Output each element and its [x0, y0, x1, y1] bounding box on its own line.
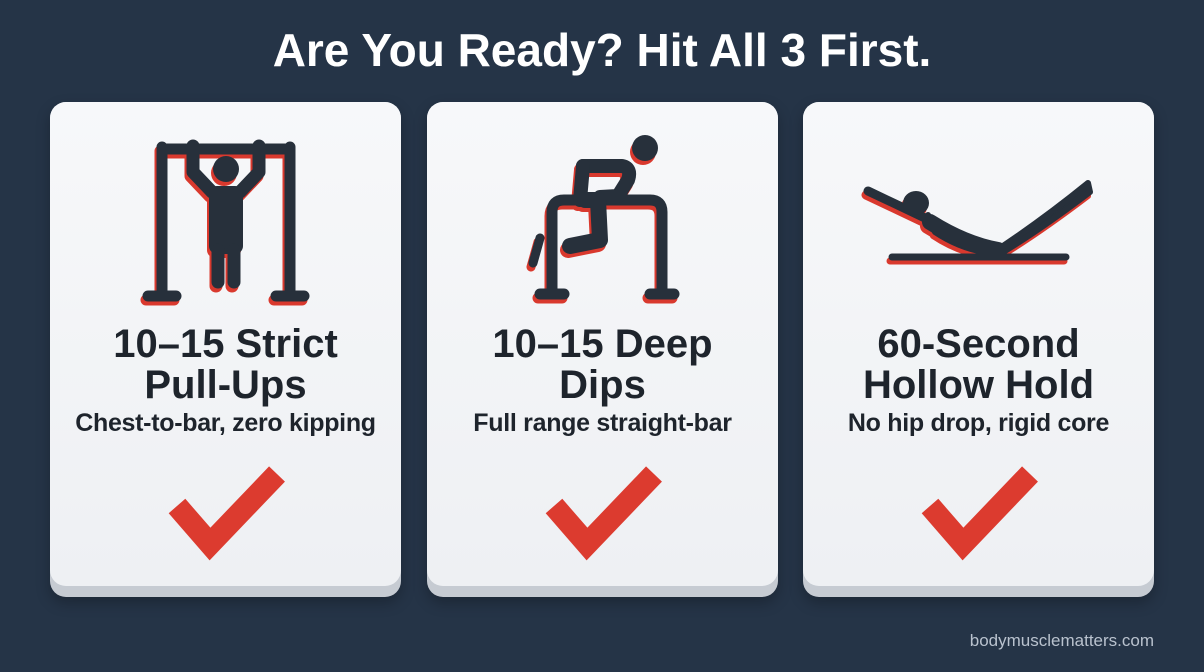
icon: dips — [531, 135, 674, 298]
heading: hollow hold: 60-Second — [877, 322, 1080, 366]
icon: checkmark 3 — [930, 474, 1030, 544]
panel: dips — [427, 102, 778, 597]
heading: dips: 10–15 Deep — [492, 322, 713, 366]
heading: dips: Dips — [559, 363, 646, 407]
title: Are You Ready? Hit All 3 First. — [273, 24, 931, 76]
heading: pull-ups — [113, 322, 338, 407]
heading: pull-ups: Pull-Ups — [144, 363, 307, 407]
panel: pull-ups — [50, 102, 401, 597]
heading: dips — [492, 322, 713, 407]
footer url: bodymusclematters.com — [970, 631, 1154, 650]
subtitle: dips: Full range straight-bar — [473, 409, 732, 437]
panel: hollow hold — [803, 102, 1154, 597]
icon: checkmark 2 — [554, 474, 654, 544]
subtitle: pull-ups: Chest-to-bar, zero kipping — [75, 409, 376, 437]
heading: hollow hold — [863, 322, 1094, 407]
icon: hollow hold — [866, 183, 1090, 261]
subtitle: hollow hold: No hip drop, rigid core — [848, 409, 1109, 437]
icon: checkmark 1 — [177, 474, 277, 544]
heading: hollow hold: Hollow Hold — [863, 363, 1094, 407]
heading: pull-ups: 10–15 Strict — [113, 322, 338, 366]
icon: pull-up — [146, 146, 304, 300]
